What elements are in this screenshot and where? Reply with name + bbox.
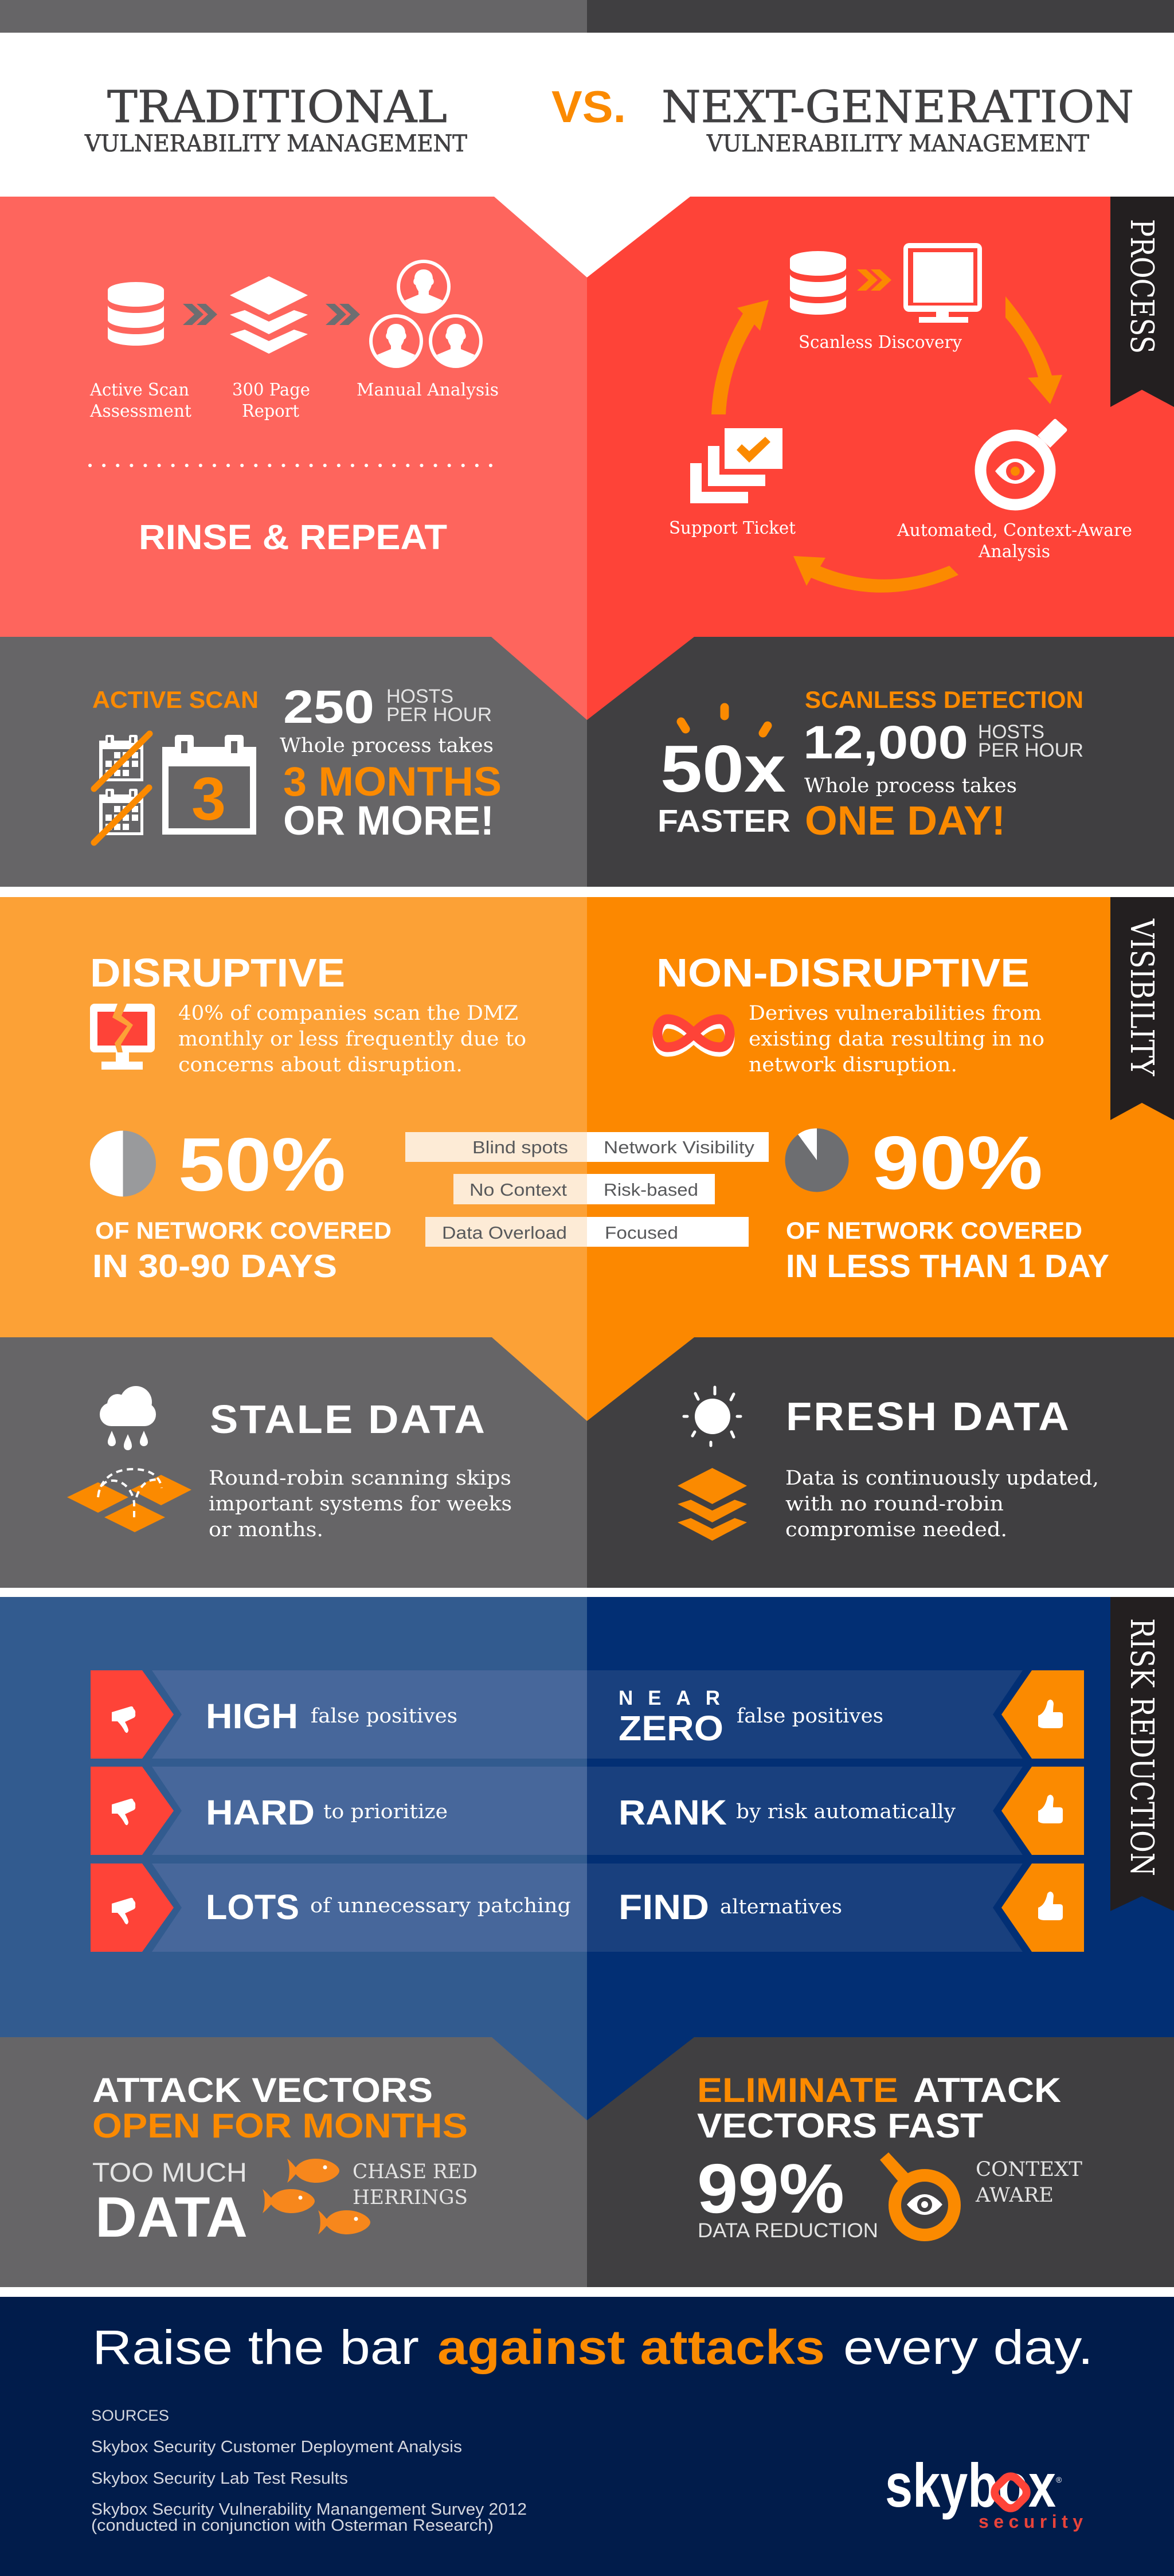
icon: context aware magnifier	[880, 2152, 954, 2235]
ribbon: risk reduction	[1110, 1597, 1174, 1911]
header	[0, 33, 1174, 199]
stat: 12,000 hosts per hour	[803, 717, 1083, 769]
text: stale data description: Round-robin scanning skips	[209, 1467, 511, 1490]
arrow: analysis to ticket	[793, 556, 958, 593]
icon: sun	[684, 1387, 741, 1446]
row: prioritize: by risk automatically	[736, 1800, 956, 1823]
logo: skybox security: ®	[1056, 2475, 1062, 2484]
heading: eliminate attack vectors fast: ATTACK	[913, 2071, 1061, 2109]
row: prioritize: to prioritize	[323, 1800, 448, 1823]
stat: 3 months or more: OR MORE!	[283, 798, 494, 844]
text: of network covered in 30-90 days	[92, 1217, 392, 1285]
label: 300 page report: Report	[242, 401, 299, 421]
label: scanless discovery: Scanless Discovery	[799, 332, 962, 353]
top bar	[0, 0, 1174, 33]
header notch	[494, 197, 690, 277]
ribbon: process	[1110, 197, 1174, 407]
text: non-disruptive description: network disruption.	[749, 1054, 957, 1076]
stat: 250 hosts per hour: HOSTS	[386, 686, 453, 707]
title: next-generation: VULNERABILITY MANAGEMENT	[706, 131, 1089, 157]
panel: right blue background	[587, 1597, 1174, 2287]
text: too much data: DATA	[95, 2185, 248, 2249]
icon: database next-gen	[790, 251, 846, 315]
icon: rain cloud	[100, 1386, 156, 1450]
row: patching: alternatives	[720, 1896, 842, 1919]
text: of network covered in less than 1 day	[786, 1217, 1109, 1285]
text: disruptive description	[178, 1002, 526, 1076]
label: automated context-aware analysis: Automated, Context-Aware	[897, 520, 1132, 541]
text: chase red herrings	[353, 2160, 478, 2209]
chart: 50 percent pie	[90, 1130, 156, 1197]
stat: one day: ONE DAY!	[805, 798, 1005, 844]
comparison bars: Focused	[605, 1223, 678, 1243]
text: whole process takes: Whole process takes	[804, 774, 1017, 797]
label: active scan assessment: Assessment	[89, 401, 191, 421]
heading: fresh data: FRESH DATA	[786, 1394, 1071, 1439]
heading: eliminate attack vectors fast: VECTORS FAST	[697, 2107, 983, 2145]
icon: round robin diamonds	[67, 1469, 191, 1532]
title: traditional	[84, 82, 467, 157]
title: next-generation: NEXT-GENERATION	[662, 82, 1134, 133]
ribbon: visibility	[1110, 897, 1174, 1120]
panel: left blue background	[0, 1597, 587, 2287]
text: whole process takes: Whole process takes	[280, 734, 494, 757]
icon: chevrons orange	[857, 269, 891, 291]
panel: traditional process background	[0, 197, 587, 887]
stat: 99 percent data reduction	[697, 2150, 878, 2242]
label: rinse and repeat: RINSE & REPEAT	[139, 518, 447, 557]
heading: attack vectors open for months: ATTACK VECTORS	[92, 2071, 433, 2109]
panel: non-disruptive background	[587, 897, 1174, 1588]
row: false positives: false positives	[737, 1705, 883, 1728]
label: active scan assessment	[89, 380, 191, 421]
panel: fresh data	[587, 1337, 1174, 1588]
ribbon: risk reduction: RISK REDUCTION	[1123, 1618, 1160, 1876]
section: risk reduction	[0, 1597, 1174, 2287]
row: false positives: ZERO	[619, 1709, 723, 1748]
text: chase red herrings: CHASE RED	[353, 2160, 478, 2183]
row: patching: of unnecessary patching	[310, 1894, 571, 1917]
panel: disruptive background	[0, 897, 587, 1588]
icon: report stack	[230, 276, 308, 354]
icon: three month calendar	[162, 735, 256, 835]
text: fresh data description	[785, 1467, 1099, 1541]
text: of network covered in 30-90 days: OF NETWORK COVERED	[95, 1217, 392, 1244]
text: fresh data description: Data is continuously updated,	[785, 1467, 1099, 1490]
stat: 250 hosts per hour	[283, 681, 492, 733]
text: disruptive description: monthly or less frequently due to	[178, 1028, 526, 1051]
icon: magnifier eye	[980, 419, 1067, 504]
stat: 50 percent: 50%	[178, 1122, 346, 1207]
label: automated context-aware analysis: Analysis	[978, 542, 1050, 562]
text: stale data description: important systems for weeks	[209, 1493, 512, 1516]
sources: SOURCES	[91, 2407, 169, 2424]
stat: 99 percent data reduction: 99%	[697, 2150, 844, 2227]
row: false positives: HIGH	[206, 1697, 298, 1736]
text: disruptive description: concerns about disruption.	[178, 1054, 463, 1076]
icon: spark	[681, 707, 768, 733]
tagline: Raise the bar	[92, 2320, 419, 2374]
title: traditional: TRADITIONAL	[107, 82, 447, 133]
tagline: every day.	[843, 2320, 1093, 2374]
text: non-disruptive description: Derives vulnerabilities from	[749, 1002, 1042, 1025]
logo: skybox security: skybox	[885, 2450, 1056, 2520]
chart: 90 percent pie	[785, 1128, 848, 1192]
text: too much data: TOO MUCH	[92, 2157, 247, 2187]
heading: eliminate attack vectors fast: ELIMINATE	[697, 2071, 898, 2109]
sources: Skybox Security Vulnerability Manangement Survey 2012	[91, 2500, 527, 2519]
logo: skybox security: security	[979, 2511, 1083, 2532]
sources: Skybox Security Lab Test Results	[91, 2469, 348, 2488]
icon: support ticket	[690, 428, 782, 503]
stat: 50x faster: FASTER	[658, 803, 791, 839]
stat: 12,000 hosts per hour: 12,000	[803, 717, 968, 769]
section: process	[0, 197, 1174, 887]
row: patching: FIND	[619, 1888, 709, 1927]
text: non-disruptive description	[749, 1002, 1044, 1076]
comparison bars: No Context	[469, 1180, 567, 1200]
text: too much data	[92, 2157, 248, 2249]
ribbon: process: PROCESS	[1123, 219, 1160, 354]
text: context aware: CONTEXT	[976, 2158, 1082, 2181]
label: 300 page report	[232, 380, 310, 421]
label: support ticket: Support Ticket	[669, 518, 796, 538]
icon: people	[371, 261, 481, 366]
text: of network covered in 30-90 days: IN 30-90 DAYS	[92, 1248, 337, 1285]
stat: 250 hosts per hour: 250	[283, 681, 374, 733]
tagline	[92, 2320, 1093, 2374]
row: false positives: false positives	[311, 1705, 457, 1728]
panel: next-gen process background	[587, 197, 1174, 887]
label: manual analysis: Manual Analysis	[357, 380, 499, 400]
row: prioritize: RANK	[619, 1793, 727, 1832]
stat: 50x faster	[658, 731, 791, 839]
tagline: against attacks	[437, 2320, 825, 2374]
title: traditional: VULNERABILITY MANAGEMENT	[84, 131, 467, 157]
text: disruptive description: 40% of companies scan the DMZ	[178, 1002, 518, 1025]
icon: chevrons	[326, 304, 360, 325]
icon: database	[108, 282, 164, 346]
comparison bars: Network Visibility	[604, 1137, 755, 1157]
panel: attack vectors open	[0, 2037, 587, 2287]
heading: active scan: ACTIVE SCAN	[92, 686, 259, 713]
row: prioritize	[91, 1767, 1084, 1855]
icon: crossed calendars	[94, 734, 150, 843]
comparison bars	[405, 1132, 769, 1247]
icon: red herrings	[263, 2159, 370, 2234]
comparison bars: Risk-based	[604, 1180, 698, 1200]
text: of network covered in less than 1 day: OF NETWORK COVERED	[786, 1217, 1082, 1244]
section: visibility	[0, 897, 1174, 1588]
text: stale data description: or months.	[209, 1518, 323, 1541]
text: fresh data description: compromise needed.	[785, 1518, 1007, 1541]
stat: 12,000 hosts per hour: HOSTS	[978, 721, 1044, 743]
heading: stale data: STALE DATA	[210, 1397, 487, 1442]
icon: broken monitor	[90, 1004, 155, 1070]
heading: disruptive: DISRUPTIVE	[90, 950, 345, 995]
panel: eliminate attack vectors	[587, 2037, 1174, 2287]
title: next-generation	[662, 82, 1134, 157]
stat: 250 hosts per hour: PER HOUR	[386, 704, 492, 726]
icon: monitor	[903, 243, 982, 323]
label: 300 page report: 300 Page	[232, 380, 310, 400]
arrow: ticket to discovery	[711, 300, 769, 414]
icon: chevrons	[183, 304, 217, 325]
panel: stale data	[0, 1337, 587, 1588]
label: active scan assessment: Active Scan	[89, 380, 189, 400]
text: context aware: AWARE	[975, 2184, 1054, 2207]
stat: 3 months or more	[283, 760, 502, 844]
row: prioritize: HARD	[206, 1793, 315, 1832]
title: vs: VS.	[551, 81, 626, 132]
row: false positives	[91, 1670, 1084, 1759]
icon: infinity	[658, 1019, 730, 1052]
panel: scanless detection stats	[587, 637, 1174, 887]
comparison bars: Blind spots	[472, 1137, 568, 1157]
heading: non-disruptive: NON-DISRUPTIVE	[656, 950, 1030, 995]
text: stale data description	[209, 1467, 512, 1541]
row: patching: LOTS	[206, 1888, 299, 1927]
stat: 90 percent: 90%	[872, 1121, 1043, 1205]
stat: 12,000 hosts per hour: PER HOUR	[978, 739, 1083, 761]
footer	[0, 2297, 1174, 2576]
ribbon: visibility: VISIBILITY	[1123, 918, 1160, 1076]
text: fresh data description: with no round-robin	[785, 1493, 1004, 1516]
heading: eliminate attack vectors fast	[697, 2071, 1061, 2145]
sources: (conducted in conjunction with Osterman Research)	[91, 2516, 494, 2535]
comparison bars: Data Overload	[442, 1223, 567, 1243]
heading: scanless detection: SCANLESS DETECTION	[805, 686, 1083, 713]
sources	[91, 2407, 527, 2535]
icon: data stack	[678, 1468, 747, 1541]
row: false positives: NEAR	[619, 1687, 720, 1709]
text: chase red herrings: HERRINGS	[353, 2186, 468, 2209]
icon: three month calendar: 3	[191, 765, 226, 833]
label: automated context-aware analysis	[897, 520, 1132, 562]
text: of network covered in less than 1 day: IN LESS THAN 1 DAY	[786, 1248, 1109, 1285]
text: non-disruptive description: existing data resulting in no	[749, 1028, 1044, 1051]
stat: 3 months or more: 3 MONTHS	[283, 760, 502, 805]
text: context aware	[975, 2158, 1082, 2207]
row: patching	[91, 1864, 1084, 1952]
stat: 99 percent data reduction: DATA REDUCTION	[698, 2219, 878, 2242]
heading: attack vectors open for months	[92, 2071, 468, 2145]
heading: attack vectors open for months: OPEN FOR MONTHS	[92, 2107, 468, 2145]
arrow: discovery to analysis	[1005, 296, 1062, 404]
panel: active scan stats	[0, 637, 587, 887]
stat: 50x faster: 50x	[660, 731, 786, 806]
sources: Skybox Security Customer Deployment Analysis	[91, 2438, 462, 2456]
